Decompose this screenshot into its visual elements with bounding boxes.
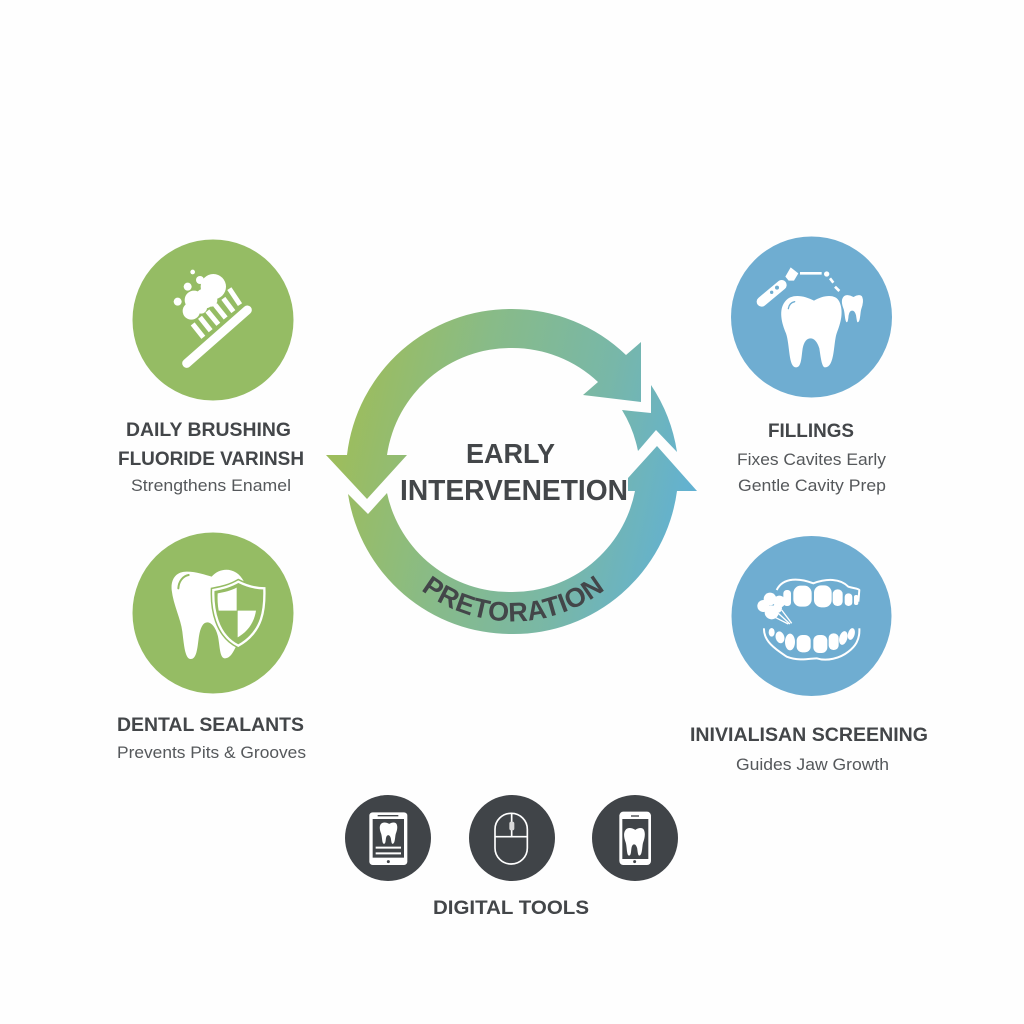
curved label: pretoration: PRETORATION xyxy=(422,576,604,622)
cycle diagram xyxy=(326,309,697,634)
icon: phone xyxy=(592,795,678,881)
panel: dental sealants xyxy=(117,532,306,762)
icon: teeth arches xyxy=(732,536,892,696)
text: strengthens enamel: Strengthens Enamel xyxy=(131,476,291,495)
icon: tooth and drill xyxy=(731,236,892,398)
text: fixes cavities: Fixes Cavites Early xyxy=(737,450,887,469)
heading: screening: INIVIALISAN SCREENING xyxy=(690,725,928,746)
text: gentle cavity prep: Gentle Cavity Prep xyxy=(738,476,886,495)
panel: digital tools xyxy=(345,795,678,919)
heading: dental sealants: DENTAL SEALANTS xyxy=(117,715,304,736)
panel: daily brushing xyxy=(118,240,304,495)
title: intervenetion: INTERVENETION xyxy=(400,475,628,507)
heading: daily brushing: DAILY BRUSHING xyxy=(126,420,291,441)
text: guides jaw growth: Guides Jaw Growth xyxy=(736,755,889,774)
icon: toothbrush xyxy=(132,240,294,400)
arrow: bottom arc to the right xyxy=(348,446,697,634)
heading: fluoride varnish: FLUORIDE VARINSH xyxy=(118,449,304,470)
title: early: EARLY xyxy=(466,438,555,469)
arrow: small right segment xyxy=(622,385,677,452)
arrow: top arc with two heads xyxy=(326,309,641,499)
heading: digital tools: DIGITAL TOOLS xyxy=(433,898,589,919)
panel: fillings xyxy=(731,236,892,495)
text: prevents pits: Prevents Pits & Grooves xyxy=(117,743,306,762)
icon: tooth with shield xyxy=(132,532,294,694)
heading: fillings: FILLINGS xyxy=(768,421,854,442)
icon: tablet xyxy=(345,795,431,881)
panel: screening xyxy=(690,536,928,774)
icon: mouse xyxy=(469,795,555,881)
